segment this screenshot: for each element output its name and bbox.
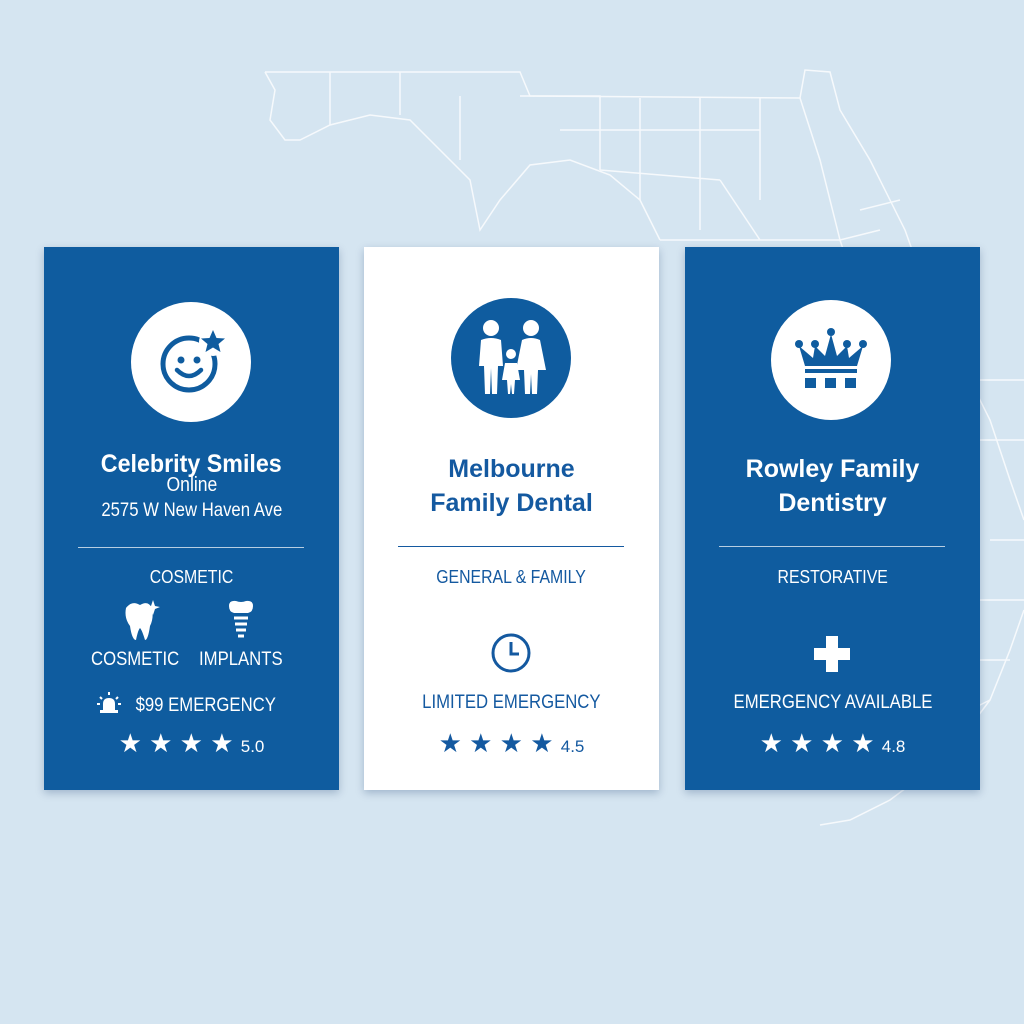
category: COSMETIC: [150, 567, 233, 587]
address: 2575 W New Haven Ave: [101, 500, 282, 521]
icon: tooth: [126, 600, 160, 640]
rating: ★ ★ ★ ★ 5.0: [119, 728, 264, 758]
title: Celebrity Smiles: [101, 450, 282, 478]
panel: Melbourne Family Dental: [364, 247, 659, 790]
icon: implant: [229, 600, 253, 638]
rating: ★ ★ ★ ★ 4.8: [760, 728, 905, 758]
panel: Celebrity Smiles: [44, 247, 339, 790]
services icons: [91, 600, 283, 670]
title: [430, 455, 593, 517]
title: Rowley Family: [746, 455, 919, 483]
icon: cross: [814, 636, 850, 672]
services icons: COSMETIC: [91, 649, 179, 670]
icon: smiling face with star: [131, 302, 251, 422]
title: [746, 455, 920, 517]
services icons: IMPLANTS: [199, 649, 283, 670]
icon: crown: [771, 300, 891, 420]
emergency: [97, 692, 276, 716]
title: Dentistry: [778, 489, 887, 517]
panel: Rowley Family Dentistry: [685, 247, 980, 790]
emergency: EMERGENCY AVAILABLE: [733, 692, 932, 713]
subtitle: Online: [166, 474, 217, 496]
emergency: $99 EMERGENCY: [136, 695, 276, 716]
icon: family: [451, 298, 571, 418]
icon: clock: [492, 634, 530, 672]
title: Family Dental: [430, 489, 593, 517]
category: GENERAL & FAMILY: [437, 567, 586, 587]
emergency: LIMITED EMERGENCY: [422, 692, 601, 713]
category: RESTORATIVE: [777, 567, 888, 587]
rating: ★ ★ ★ ★ 4.5: [439, 728, 584, 758]
title: Melbourne: [448, 455, 575, 483]
